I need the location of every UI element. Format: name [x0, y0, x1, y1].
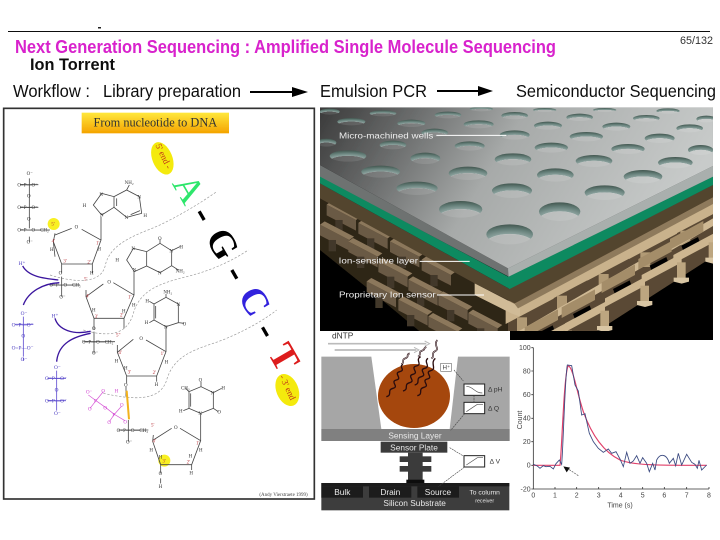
silicon substrate — [321, 483, 509, 510]
title: Next Generation Sequencing : Amplified Single Molecule Sequencing — [15, 37, 556, 57]
carbon position numbers: 3' — [63, 260, 67, 265]
workflow row — [13, 81, 716, 101]
magenta leaving phosphate group: O — [103, 406, 107, 411]
atom labels: H — [122, 309, 126, 314]
sensor lattice: left side — [320, 184, 508, 331]
carbon position numbers: 5' — [84, 278, 87, 283]
atom labels: N — [99, 193, 103, 198]
sensing layer: Sensing Layer — [388, 430, 442, 440]
strand letters A G C T — [164, 167, 307, 379]
panel: chip layers illustration — [320, 107, 713, 331]
carbon position numbers: 2' — [187, 460, 190, 465]
silicon substrate: receiver — [475, 499, 494, 505]
atom labels: H — [189, 472, 193, 477]
atom labels: NH₂ — [176, 270, 185, 275]
released pyrophosphate and curved arrows: O — [21, 333, 25, 339]
badge: 3 prime end — [271, 370, 304, 410]
carbon position numbers: 5' — [151, 424, 154, 429]
released pyrophosphate and curved arrows: O⁻ — [21, 357, 28, 363]
label: proprietary ion sensor: Proprietary Ion sensor — [339, 289, 436, 299]
atom labels: NH₂ — [125, 181, 134, 186]
sensor plate — [381, 442, 447, 453]
atom labels: O — [174, 426, 178, 431]
carbon position numbers: 4' — [52, 240, 55, 245]
atom labels: H — [179, 245, 183, 250]
released pyrophosphate and curved arrows: O⁻ — [54, 365, 61, 371]
atom labels: N — [169, 249, 173, 254]
silicon substrate: To column — [469, 489, 500, 496]
workflow row: Library preparation — [103, 81, 241, 101]
carbon position numbers: 2' — [87, 260, 91, 265]
magenta leaving phosphate group: O — [107, 421, 111, 426]
silicon substrate: Drain — [380, 487, 401, 497]
atom labels: O — [139, 337, 143, 342]
atom labels: N — [125, 216, 129, 221]
delta V inset — [464, 456, 501, 467]
delta Q inset: Δ Q — [488, 405, 499, 412]
sensor top plate — [320, 183, 713, 317]
silicon substrate: Source — [425, 487, 452, 497]
atom labels: H — [143, 214, 147, 219]
start marker arrow — [563, 466, 578, 476]
magenta leaving phosphate group: O — [88, 408, 92, 413]
arrow: emulsion PCR to semiconductor sequencing — [437, 86, 493, 96]
atom labels: N — [164, 326, 168, 331]
x-axis labels — [531, 493, 711, 500]
arrow: library preparation to emulsion PCR — [250, 87, 308, 97]
label: dNTP — [328, 331, 430, 353]
badge: 5 prime end — [147, 139, 178, 178]
atom labels: N — [133, 269, 137, 274]
atom labels: H — [159, 455, 163, 460]
atom labels: O⁻ — [27, 240, 33, 245]
atom labels: O=P—O—CH₂ — [82, 340, 114, 345]
atom labels: O=P—O—CH₂ — [49, 284, 81, 289]
atom labels: O=P—O—CH₂ — [117, 429, 148, 434]
carbon position numbers: 5" — [116, 334, 121, 339]
x-axis labels: 4 — [619, 493, 623, 500]
carbon position numbers: 1' — [196, 441, 199, 446]
atom labels: O — [107, 281, 111, 286]
atom labels: O — [217, 411, 221, 416]
atom labels: O — [158, 237, 162, 242]
atom labels: H — [199, 449, 203, 454]
y-axis labels: 60 — [523, 392, 531, 399]
released pyrophosphate and curved arrows: O — [55, 388, 59, 394]
highlight: 5 prime carbon — [48, 218, 60, 230]
delta pH inset: Δ pH — [488, 387, 503, 394]
citation: (Andy Vierstraete 1999) — [259, 493, 308, 498]
micro-machined wells — [316, 107, 716, 244]
x-axis labels: 6 — [662, 493, 666, 500]
atom labels: O — [59, 272, 63, 277]
subtitle: Ion Torrent — [30, 55, 115, 74]
atom labels: H — [179, 410, 183, 415]
delta pH inset — [464, 384, 503, 395]
released pyrophosphate and curved arrows: O⁻ — [21, 311, 28, 317]
atom labels: O — [27, 195, 31, 200]
magenta leaving phosphate group: P — [112, 413, 115, 418]
carbon position numbers: 4' — [86, 295, 89, 300]
label: micro-machined wells: Micro-machined wells — [339, 130, 434, 140]
workflow row: Emulsion PCR — [320, 81, 427, 101]
heading: from nucleotide to DNA — [82, 113, 229, 133]
atom labels: H — [132, 304, 136, 309]
y-axis labels: 40 — [523, 416, 531, 423]
black band above chart — [510, 331, 713, 340]
atom labels: O — [27, 218, 31, 223]
carbon position numbers: 1' — [128, 295, 131, 300]
workflow row: Workflow : — [13, 81, 90, 101]
atom labels: H — [115, 359, 119, 364]
y-axis labels — [519, 345, 531, 493]
x-axis labels: 1 — [553, 493, 557, 500]
label: ion-sensitive layer — [340, 258, 470, 265]
atom labels: H — [115, 258, 119, 263]
atom labels: N — [211, 391, 215, 396]
carbon position numbers: 1' — [96, 241, 99, 246]
x-axis labels: 3 — [597, 493, 601, 500]
carbon position numbers: 3' — [128, 370, 131, 375]
x-axis labels: 2 — [575, 493, 579, 500]
atom labels: O=P—O⁻ — [17, 183, 38, 188]
chemical bonds — [20, 178, 222, 483]
silicon substrate: Bulk — [334, 487, 351, 497]
atom labels: NH₂ — [163, 290, 173, 295]
orange bond-forming arrow — [127, 391, 129, 419]
released pyrophosphate and curved arrows: O=P—O⁻ — [45, 398, 67, 404]
fitted curve — [533, 366, 707, 465]
atom labels: O⁻ — [92, 351, 99, 356]
released pyrophosphate and curved arrows: H⁺ — [19, 261, 26, 267]
sensing layer — [321, 429, 510, 441]
atom labels: O — [92, 327, 96, 332]
magenta leaving phosphate group — [86, 390, 127, 426]
atom labels: O⁻ — [126, 441, 133, 446]
released pyrophosphate and curved arrows: O=P—O⁻ — [45, 376, 67, 382]
heading: from nucleotide to DNA: From nucleotide to DNA — [94, 115, 217, 129]
y-axis labels: 20 — [523, 439, 531, 446]
atom labels: H — [145, 321, 149, 326]
carbon position numbers: 5' — [51, 222, 55, 227]
sensor lattice: right side — [503, 185, 713, 331]
strand letters A G C T: A — [164, 167, 213, 211]
carbon position numbers: 3' — [162, 460, 166, 465]
carbon position numbers: 4' — [152, 440, 156, 445]
atom labels: O — [124, 384, 128, 389]
released pyrophosphate and curved arrows — [12, 261, 91, 417]
atom labels: H — [145, 300, 149, 305]
atom labels: N — [198, 412, 202, 417]
atom labels: H — [83, 204, 87, 209]
green ion-sensitive layer — [320, 176, 713, 289]
atom labels: H — [50, 248, 54, 253]
x-axis labels: 7 — [685, 493, 689, 500]
magenta leaving phosphate group: O — [123, 420, 127, 425]
sensor plate: Sensor Plate — [390, 442, 438, 452]
x-axis labels: 0 — [531, 493, 535, 500]
atom labels: H — [97, 248, 101, 253]
bead — [378, 364, 450, 428]
magenta leaving phosphate group: O⁻ — [86, 390, 93, 395]
proton label: H⁺ — [443, 365, 450, 372]
axes — [531, 348, 709, 489]
magenta leaving phosphate group: O — [101, 390, 105, 395]
panel: nucleotide to DNA chemistry — [4, 108, 314, 499]
carbon position numbers: 2' — [120, 314, 123, 319]
magenta leaving phosphate group: H — [115, 390, 119, 395]
atom labels: O — [183, 322, 187, 327]
released pyrophosphate and curved arrows: O=P—O⁻ — [12, 322, 34, 328]
atom labels: N — [177, 303, 181, 308]
atom labels: H — [159, 485, 163, 490]
signal arrows — [439, 370, 474, 486]
page number: 65/132 — [680, 35, 713, 47]
atom labels: H — [221, 387, 225, 392]
proton label — [441, 363, 451, 372]
atom labels: N — [137, 195, 141, 200]
released pyrophosphate and curved arrows: H⁺ — [52, 313, 59, 319]
strand letters A G C T: G — [197, 221, 247, 267]
strand letters A G C T: C — [229, 280, 278, 324]
line chart: ion count over time — [510, 340, 712, 515]
via stem — [400, 453, 431, 484]
atom labels: O — [75, 226, 79, 231]
label: ion-sensitive layer: Ion-sensitive layer — [339, 256, 418, 266]
atom labels: CH₃ — [181, 386, 190, 391]
atom labels — [17, 172, 225, 490]
carbon position numbers: 1' — [161, 352, 164, 357]
carbon position numbers: 3' — [95, 315, 98, 320]
header rule — [8, 27, 710, 32]
strand letters A G C T: T — [259, 337, 307, 379]
carbon position numbers — [51, 222, 199, 465]
delta Q inset — [464, 402, 499, 414]
atom labels: N — [158, 271, 162, 276]
released pyrophosphate and curved arrows: O⁻ — [54, 411, 61, 417]
carbon position numbers: 4' — [118, 351, 122, 356]
atom labels: H — [124, 366, 128, 371]
atom labels: H — [165, 360, 169, 365]
y-axis labels: -20 — [521, 486, 531, 493]
axis title: time: Time (s) — [607, 503, 633, 510]
atom labels: O⁻ — [27, 172, 33, 177]
y-axis labels: 100 — [519, 345, 531, 352]
atom labels: O⁻ — [59, 295, 66, 300]
atom labels: H — [90, 272, 94, 277]
silicon substrate: Silicon Substrate — [383, 498, 446, 508]
atom labels: H — [189, 455, 193, 460]
delta V inset: Δ V — [490, 459, 501, 466]
well walls — [321, 357, 510, 429]
y-axis labels: 0 — [527, 463, 531, 470]
released pyrophosphate and curved arrows: O=P—O⁻ — [12, 345, 34, 351]
gray well plate — [320, 107, 713, 277]
dashed nucleotide separators — [50, 192, 277, 398]
magenta leaving phosphate group: P — [94, 400, 97, 405]
axis title: count: Count — [517, 411, 524, 429]
DNA strands — [386, 340, 437, 397]
magenta leaving phosphate group: O — [120, 404, 124, 409]
atom labels: O=P—O—CH₂ — [17, 229, 49, 234]
atom labels: N — [100, 213, 104, 218]
x-axis labels: 8 — [707, 493, 711, 500]
badge: 3 prime end: - 3' end — [278, 373, 298, 402]
y-axis labels: 80 — [523, 368, 531, 375]
label: dNTP: dNTP — [332, 331, 354, 341]
badge: 5 prime end: 5' end - — [154, 142, 174, 170]
atom labels: O — [199, 379, 203, 384]
carbon position numbers: 2' — [153, 371, 156, 376]
atom labels: H — [149, 449, 153, 454]
atom labels: O — [159, 472, 163, 477]
atom labels: H — [155, 383, 159, 388]
highlight: 3 prime carbon — [158, 455, 170, 467]
atom labels: H — [92, 309, 96, 314]
measured signal — [533, 365, 707, 472]
atom labels: O=P—O⁻ — [17, 206, 38, 211]
atom labels: N — [131, 247, 135, 252]
x-axis labels: 5 — [641, 493, 645, 500]
panel: semiconductor sensing well diagram — [320, 331, 510, 511]
